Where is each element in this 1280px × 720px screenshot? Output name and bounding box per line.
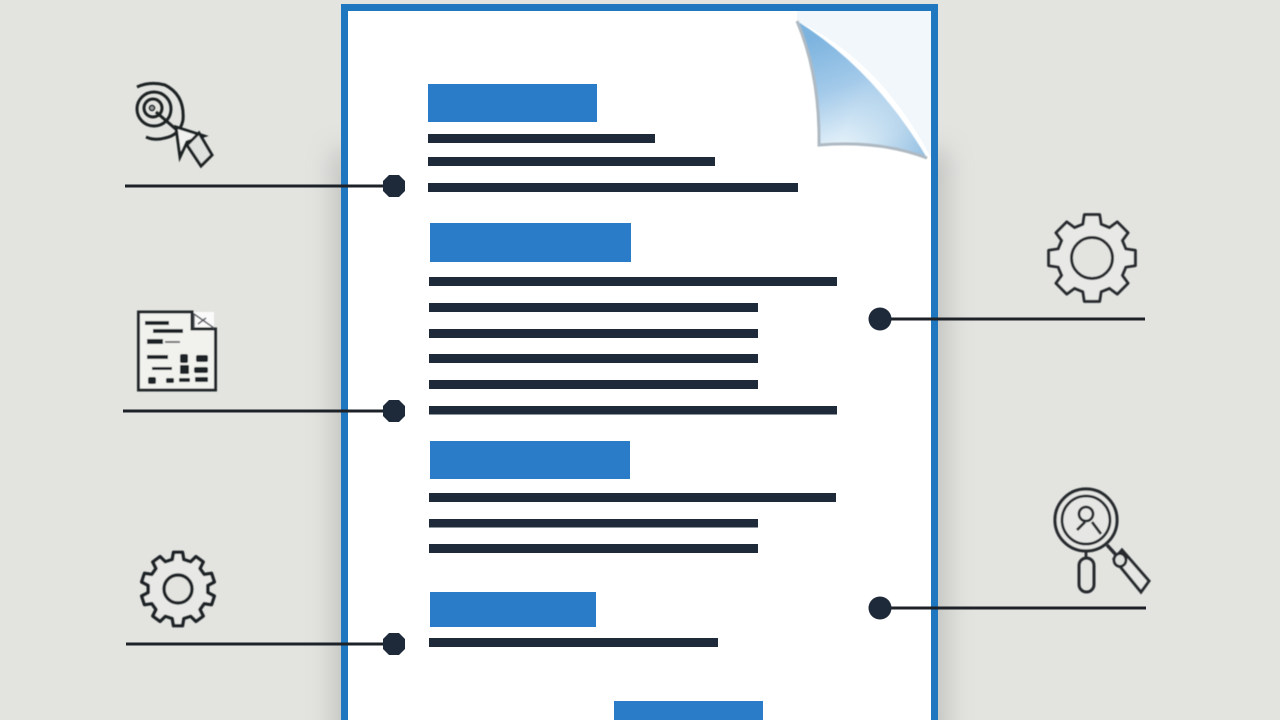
icon: magnifying glass [1055, 489, 1149, 592]
connector: lower right [868, 596, 1146, 620]
icon: report document [138, 312, 216, 390]
connector: upper right [868, 308, 1145, 330]
section 5 heading [614, 701, 763, 720]
connector: bottom left [126, 633, 405, 655]
document shadow [332, 150, 948, 720]
icon: gear left [142, 552, 214, 626]
section 4 [429, 592, 718, 647]
icon: page curl [797, 21, 927, 158]
icon: target with arrow [137, 83, 212, 166]
section 2 [429, 223, 837, 414]
section 1 [428, 84, 798, 192]
panel: document page [344, 8, 934, 720]
section 3 [429, 441, 836, 553]
connector: middle left [123, 400, 405, 422]
connector: top left [125, 175, 405, 197]
page corner background [797, 11, 931, 158]
icon: gear right [1049, 215, 1135, 301]
